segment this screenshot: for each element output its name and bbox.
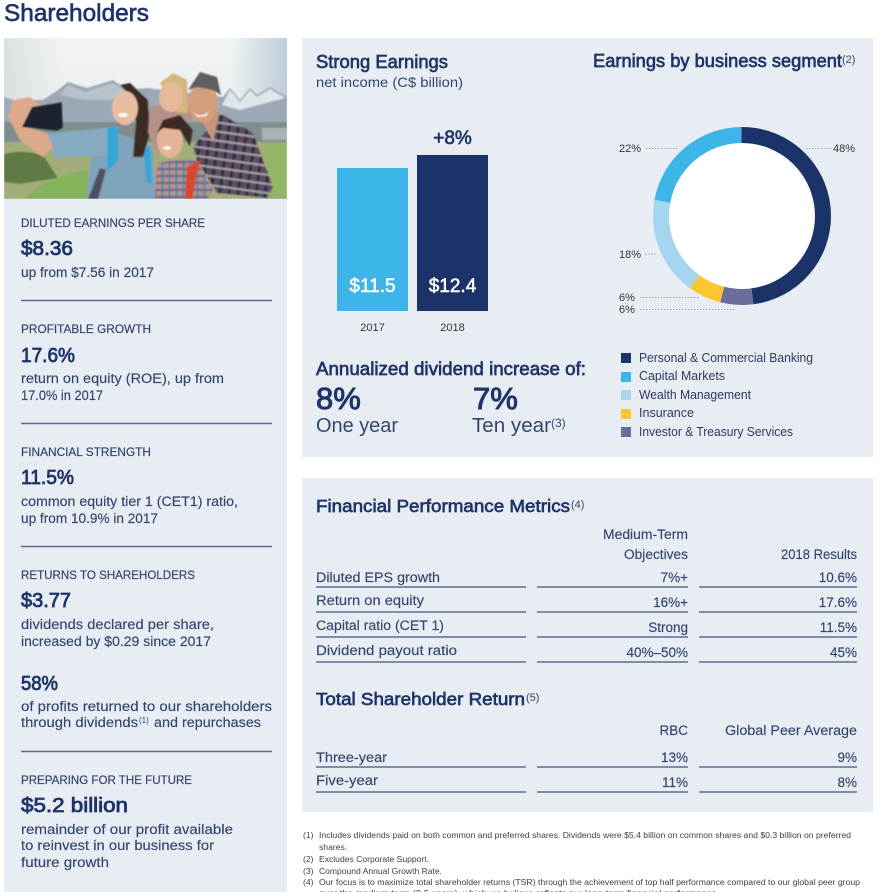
dividend increase: Ten year <box>472 415 551 437</box>
table: total shareholder return: 9% <box>837 750 857 765</box>
block: preparing for the future: future growth <box>21 855 109 870</box>
block: preparing for the future: remainder of our profit available <box>21 822 233 837</box>
table: total shareholder return: Global Peer Average <box>725 723 857 738</box>
table: total shareholder return <box>316 723 857 792</box>
footnotes: (2) <box>303 854 314 864</box>
block: financial strength: up from 10.9% in 2017 <box>21 511 158 526</box>
bar chart: net income: 2018 <box>440 322 465 334</box>
boy <box>155 160 213 199</box>
block: returns to shareholders: $3.77 <box>21 590 71 612</box>
footnotes <box>303 830 860 892</box>
bar chart: net income <box>337 128 488 334</box>
table: financial performance metrics: Capital ratio (CET 1) <box>316 618 444 633</box>
table: financial performance metrics: Diluted EPS growth <box>316 570 440 585</box>
block: diluted earnings per share: up from $7.56 in 2017 <box>21 265 154 280</box>
block: returns to shareholders: (1) <box>139 716 149 725</box>
panel: performance metrics <box>302 478 873 812</box>
dividend increase: (3) <box>551 416 566 430</box>
table: total shareholder return: 11% <box>662 775 688 790</box>
block: diluted earnings per share: DILUTED EARNINGS PER SHARE <box>21 216 205 230</box>
donut chart: earnings by segment: 18% <box>619 249 641 261</box>
footnotes: (1) <box>303 830 314 840</box>
block: preparing for the future <box>21 773 233 870</box>
block: financial strength: FINANCIAL STRENGTH <box>21 445 151 459</box>
panel: earnings <box>302 38 873 457</box>
table: financial performance metrics: 45% <box>830 645 857 660</box>
donut chart: earnings by segment <box>619 135 855 316</box>
block: returns to shareholders <box>21 568 272 730</box>
block: returns to shareholders: dividends declared per share, <box>21 617 214 632</box>
table: total shareholder return: 13% <box>661 750 688 765</box>
footnotes: (3) <box>303 866 314 876</box>
heading: total shareholder return: (5) <box>526 692 539 704</box>
table: total shareholder return: Five-year <box>316 773 379 788</box>
heading: earnings by segment: (2) <box>842 54 855 66</box>
table: financial performance metrics: Medium-Term <box>603 527 688 542</box>
block: returns to shareholders: increased by $0.29 since 2017 <box>21 634 211 649</box>
donut chart: earnings by segment: 6% <box>619 304 635 316</box>
title: Shareholders <box>4 0 149 27</box>
table: financial performance metrics: Dividend payout ratio <box>316 643 457 658</box>
legend <box>621 351 813 439</box>
heading: strong earnings: Strong Earnings <box>316 52 448 72</box>
table: financial performance metrics: Strong <box>648 620 688 635</box>
table: total shareholder return: RBC <box>659 723 688 738</box>
table: financial performance metrics: 17.6% <box>819 595 857 610</box>
block: profitable growth: 17.0% in 2017 <box>21 388 103 403</box>
heading: strong earnings: net income (C$ billion) <box>316 74 463 90</box>
footnotes: Includes dividends paid on both common and preferred shares. Dividends were $5.4 billion on common shares and $0.3 billion on preferred <box>319 830 851 840</box>
legend: Insurance <box>639 406 694 420</box>
dividend increase: 8% <box>316 381 361 416</box>
dividend increase: One year <box>316 415 398 437</box>
table: financial performance metrics: 7%+ <box>661 570 688 585</box>
block: diluted earnings per share: $8.36 <box>21 238 73 260</box>
table: financial performance metrics <box>316 527 857 662</box>
block: preparing for the future: to reinvest in our business for <box>21 838 215 853</box>
bar chart: net income: $12.4 <box>429 276 477 297</box>
legend: Investor & Treasury Services <box>639 425 793 439</box>
girl <box>87 127 155 199</box>
block: financial strength: common equity tier 1 (CET1) ratio, <box>21 494 238 509</box>
bar chart: net income: $11.5 <box>349 276 396 297</box>
block: profitable growth: 17.6% <box>21 345 75 367</box>
dividend increase <box>316 359 586 437</box>
table: financial performance metrics: 40%–50% <box>626 645 688 660</box>
block: returns to shareholders: RETURNS TO SHAREHOLDERS <box>21 568 195 582</box>
donut chart: earnings by segment: 22% <box>619 143 641 155</box>
block: returns to shareholders: and repurchases <box>154 715 261 730</box>
table: total shareholder return: 8% <box>837 775 857 790</box>
heading: financial performance metrics: Financial Performance Metrics <box>316 496 570 516</box>
heading: total shareholder return: Total Shareholder Return <box>316 689 525 709</box>
table: total shareholder return: Three-year <box>316 750 388 765</box>
table: financial performance metrics: Objectives <box>624 547 688 562</box>
table: financial performance metrics: 11.5% <box>820 620 857 635</box>
woman <box>148 104 195 155</box>
panel: key figures <box>4 38 287 892</box>
table: financial performance metrics: Return on equity <box>316 593 424 608</box>
footnotes: Excludes Corporate Support. <box>319 854 429 864</box>
table: financial performance metrics: 10.6% <box>819 570 857 585</box>
heading: strong earnings <box>316 52 463 90</box>
legend: Capital Markets <box>639 369 725 383</box>
heading: earnings by segment: Earnings by business segment <box>593 51 842 71</box>
legend: Personal & Commercial Banking <box>639 351 813 365</box>
legend: Wealth Management <box>639 388 752 402</box>
table: financial performance metrics: 2018 Results <box>781 547 857 562</box>
footnotes: (4) <box>303 877 314 887</box>
dividend increase: 7% <box>473 381 518 416</box>
block: financial strength: 11.5% <box>21 467 74 489</box>
block: profitable growth <box>21 322 224 403</box>
footnotes: Our focus is to maximize total shareholder returns (TSR) through the achievement of top half performance compared to our global peer group <box>319 877 860 887</box>
footnotes: shares. <box>319 842 347 852</box>
dividend increase: Annualized dividend increase of: <box>316 359 586 379</box>
donut chart: earnings by segment: 6% <box>619 292 635 304</box>
block: profitable growth: PROFITABLE GROWTH <box>21 322 151 336</box>
bar chart: net income: 2017 <box>360 322 385 334</box>
bar chart: net income: +8% <box>433 128 472 149</box>
footnotes: Compound Annual Growth Rate. <box>319 866 442 876</box>
block: returns to shareholders: 58% <box>21 673 58 695</box>
block: preparing for the future: $5.2 billion <box>21 795 128 817</box>
block: returns to shareholders: of profits returned to our shareholders <box>21 699 272 714</box>
heading: financial performance metrics: (4) <box>571 499 584 511</box>
block: returns to shareholders: through dividends <box>21 715 138 730</box>
block: preparing for the future: PREPARING FOR THE FUTURE <box>21 773 192 787</box>
block: diluted earnings per share <box>21 216 205 280</box>
donut chart: earnings by segment: 48% <box>833 143 855 155</box>
block: financial strength <box>21 445 238 526</box>
photo: family selfie <box>4 38 287 199</box>
table: financial performance metrics: 16%+ <box>653 595 688 610</box>
man <box>193 113 273 198</box>
block: profitable growth: return on equity (ROE), up from <box>21 371 224 386</box>
